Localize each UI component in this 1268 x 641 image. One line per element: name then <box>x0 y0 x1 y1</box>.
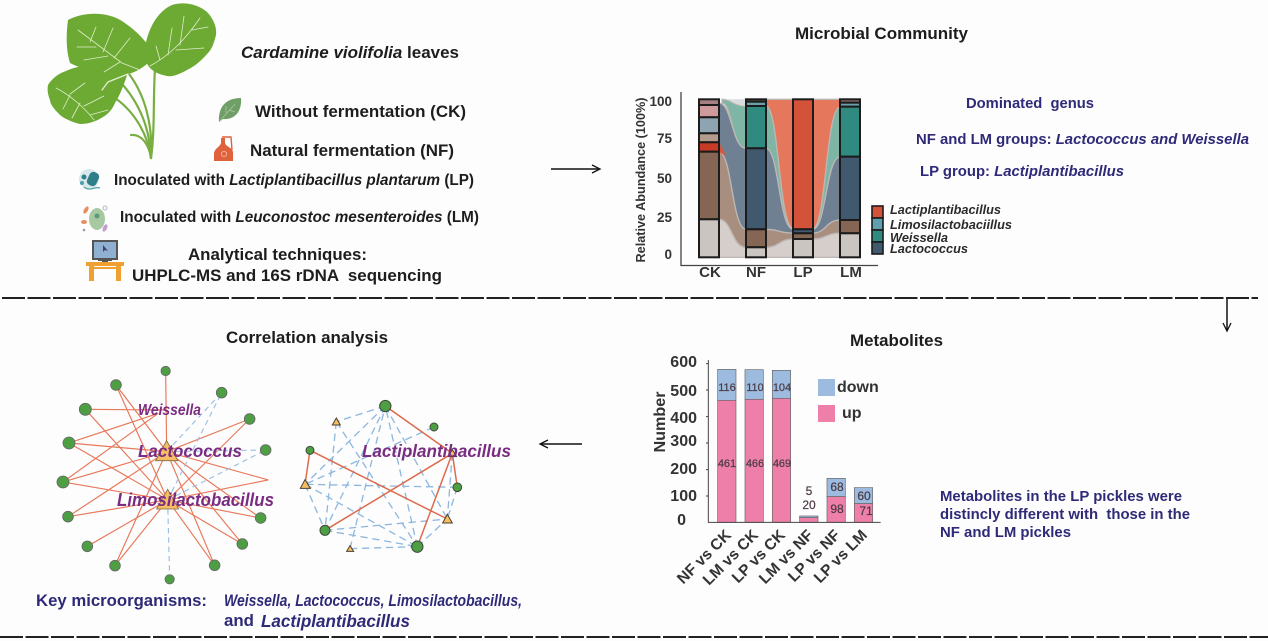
legend: down and up <box>818 379 879 422</box>
divider: bottom dashed <box>0 636 1268 638</box>
chart: alluvial relative abundance: 75 <box>657 131 672 146</box>
category labels: LM vs CK <box>700 526 762 589</box>
illustration: Cardamine violifolia plant <box>48 3 216 158</box>
text: inoculated LP: Inoculated with Lactiplantibacillus plantarum (LP) <box>114 172 474 189</box>
chart: alluvial relative abundance: Relative Abundance (100%) <box>634 98 648 262</box>
text: analytical techniques: Analytical techniques: <box>188 245 367 264</box>
text: analytical techniques: UHPLC-MS and 16S rDNA sequencing <box>132 266 442 285</box>
heading: microbial community: Microbial Community <box>795 24 969 43</box>
label: Lactiplantibacillus: Lactiplantibacillus <box>362 441 511 461</box>
arrow: metabolites to correlation <box>540 440 582 448</box>
icon: fermentation still <box>214 137 233 161</box>
value labels: 60 <box>857 489 871 503</box>
chart: alluvial relative abundance: NF <box>746 264 766 281</box>
value labels: 20 <box>802 498 816 512</box>
text: plant name: Cardamine violifolia leaves <box>241 43 459 62</box>
tick labels <box>670 354 697 529</box>
label: Lactococcus: Lactococcus <box>138 441 242 461</box>
chart: alluvial relative abundance: LM <box>840 264 862 281</box>
legend: genera: Lactococcus <box>890 241 968 256</box>
chart: alluvial relative abundance: 100 <box>649 94 672 109</box>
tick labels: 0 <box>677 512 686 529</box>
tick labels: 200 <box>670 461 697 478</box>
text: metabolites conclusion: distincly different with those in the <box>940 507 1190 523</box>
legend: genera: Weissella <box>890 230 948 245</box>
bar: NF <box>746 99 766 257</box>
tick labels: 100 <box>670 488 697 505</box>
text: without fermentation: Without fermentation (CK) <box>255 102 466 121</box>
value labels: 116 <box>718 382 736 394</box>
value labels: 98 <box>830 502 844 516</box>
tick labels: 300 <box>670 433 697 450</box>
legend: genera: Lactiplantibacillus <box>890 202 1001 217</box>
value labels: 104 <box>773 382 791 394</box>
icon: computer on desk <box>86 240 124 281</box>
heading: metabolites: Metabolites <box>850 331 943 350</box>
legend: down and up: down <box>837 379 879 396</box>
chart: alluvial relative abundance: CK <box>699 264 721 281</box>
category labels: LP vs LM <box>811 527 871 587</box>
text: analytical techniques <box>132 245 442 285</box>
legend: down and up: up <box>842 405 862 422</box>
text: key microorganisms: Key microorganisms: <box>36 592 207 610</box>
value labels: 469 <box>773 458 791 470</box>
value labels: 5 <box>806 484 813 498</box>
category labels <box>674 526 871 589</box>
tick labels: 500 <box>670 383 697 400</box>
flows NF to LP <box>766 99 793 257</box>
tick labels: 400 <box>670 410 697 427</box>
icon: bacteria teal <box>79 169 100 189</box>
chart: alluvial relative abundance: 25 <box>657 210 672 225</box>
text: key microorganisms: Weissella, Lactococcus, Limosilactobacillus, <box>224 592 522 610</box>
text: key microorganisms: Lactiplantibacillus <box>261 611 410 631</box>
icon: bacteria green <box>81 206 109 232</box>
legend: genera <box>872 202 1012 256</box>
text: natural fermentation: Natural fermentation (NF) <box>250 141 454 160</box>
chart: network left <box>57 366 271 584</box>
chart: alluvial relative abundance: 50 <box>657 171 672 186</box>
text: dominated genus: NF and LM groups: Lactococcus and Weissella <box>916 131 1249 148</box>
divider: top dashed <box>2 297 1258 299</box>
category labels: NF vs CK <box>674 526 735 588</box>
flows LP to LM <box>813 99 840 257</box>
flows CK to NF <box>719 99 746 257</box>
bars up <box>718 398 873 522</box>
bars down <box>718 369 873 518</box>
label: Weissella: Weissella <box>138 402 201 419</box>
arrow: down to metabolites <box>1223 299 1231 331</box>
text: dominated genus <box>916 95 1249 180</box>
legend: genera: Limosilactobaciillus <box>890 217 1012 232</box>
text: dominated genus: LP group: Lactiplantibacillus <box>920 163 1124 180</box>
text: key microorganisms: and <box>224 611 254 630</box>
icon: leaf <box>219 98 241 122</box>
text: metabolites conclusion <box>940 489 1190 541</box>
category labels: LP vs NF <box>785 527 844 586</box>
chart: alluvial relative abundance <box>634 92 878 281</box>
category labels: LP vs CK <box>729 526 789 587</box>
value labels <box>718 382 873 518</box>
category labels: LM vs NF <box>756 527 817 588</box>
value labels: 461 <box>718 458 736 470</box>
value labels: 68 <box>830 480 844 494</box>
chart: alluvial relative abundance: 0 <box>664 247 672 262</box>
chart: metabolites stacked bars: Number <box>652 391 669 453</box>
text: dominated genus: Dominated genus <box>966 95 1094 112</box>
arrow: to microbial community <box>551 165 600 173</box>
text: inoculated LM: Inoculated with Leuconostoc mesenteroides (LM) <box>120 209 479 226</box>
text: key microorganisms <box>36 592 522 631</box>
bar: CK <box>699 99 719 257</box>
text: metabolites conclusion: NF and LM pickles <box>940 525 1071 541</box>
text: metabolites conclusion: Metabolites in the LP pickles were <box>940 489 1182 505</box>
value labels: 71 <box>859 504 873 518</box>
bar: LP <box>793 99 813 257</box>
value labels: 110 <box>746 382 764 394</box>
chart: network right <box>300 400 462 552</box>
label: Limosilactobacillus: Limosilactobacillus <box>117 490 274 510</box>
tick labels: 600 <box>670 354 697 371</box>
chart: alluvial relative abundance: LP <box>793 264 813 281</box>
heading: correlation analysis: Correlation analysis <box>226 328 388 347</box>
chart: metabolites stacked bars <box>652 354 881 589</box>
value labels: 466 <box>746 458 764 470</box>
bar: LM <box>840 99 860 257</box>
